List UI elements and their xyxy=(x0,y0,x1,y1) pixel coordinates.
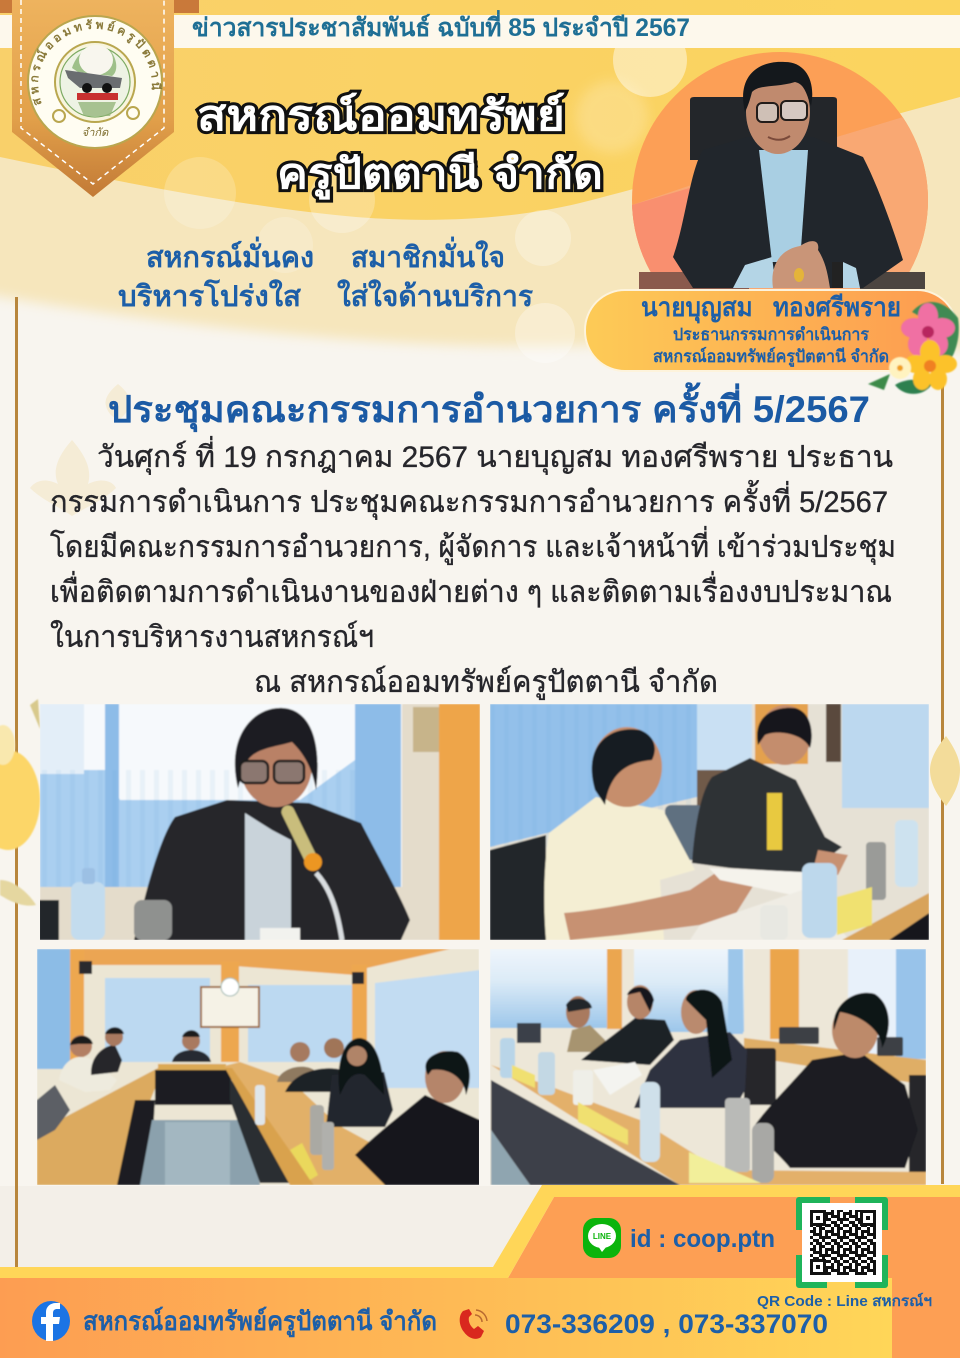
main heading: ประชุมคณะกรรมการอำนวยการ ครั้งที่ 5/2567 xyxy=(108,382,870,433)
right gold vertical rule xyxy=(941,384,944,1184)
ornament: faint thai motifs xyxy=(30,384,130,516)
ribbon badge with logo xyxy=(12,0,174,197)
article body text: เพื่อติดตามการดำเนินงานของฝ่ายต่าง ๆ และติดตามเรื่องงบประมาณ xyxy=(50,571,892,609)
icon: telephone xyxy=(460,1309,487,1339)
slogan: สหกรณ์มั่นคง xyxy=(146,236,314,274)
decorative motif at right edge xyxy=(930,736,960,806)
photo 2: two committee members at table xyxy=(490,704,929,940)
article body text: ณ สหกรณ์ออมทรัพย์ครูปัตตานี จำกัด xyxy=(254,665,718,700)
slogan: บริหารโปร่งใส xyxy=(118,278,301,313)
lower left panel tint xyxy=(0,1186,540,1268)
icon: line xyxy=(583,1218,621,1258)
qr caption: QR Code : Line สหกรณ์ฯ xyxy=(757,1292,932,1310)
logo seal: สหกรณ์ออมทรัพย์ครูปัตตานี xyxy=(31,19,162,106)
article body text: วันศุกร์ ที่ 19 กรกฎาคม 2567 นายบุญสม ทองศรีพราย ประธาน xyxy=(97,436,893,476)
photo 4: committee members along table xyxy=(490,949,926,1185)
footer text xyxy=(83,1306,828,1339)
tropical flowers decoration xyxy=(868,302,959,394)
logo seal xyxy=(27,15,163,149)
slogan xyxy=(118,236,533,313)
header background waves xyxy=(0,0,960,440)
photo 1: chairman speaking at microphone xyxy=(39,704,480,940)
line contact xyxy=(583,1218,775,1258)
organisation title: สหกรณ์ออมทรัพย์ xyxy=(197,92,565,139)
photo 3: meeting room wide view xyxy=(37,949,480,1185)
chairman name plate: ประธานกรรมการดำเนินการ xyxy=(673,325,870,344)
slogan: สมาชิกมั่นใจ xyxy=(351,236,505,274)
chairman name plate xyxy=(585,290,957,371)
footer text: 073-336209 , 073-337070 xyxy=(505,1309,828,1339)
organisation title xyxy=(197,92,603,200)
footer band xyxy=(0,1278,892,1358)
contact panel: line id and qr code xyxy=(0,1185,960,1358)
slogan: ใส่ใจด้านบริการ xyxy=(337,279,533,313)
article body text: กรรมการดำเนินการ ประชุมคณะกรรมการอำนวยการ ครั้งที่ 5/2567 xyxy=(50,480,888,521)
footer text: สหกรณ์ออมทรัพย์ครูปัตตานี จำกัด xyxy=(83,1306,437,1338)
icon: line: LINE xyxy=(593,1232,612,1241)
chairman name plate: สหกรณ์ออมทรัพย์ครูปัตตานี จำกัด xyxy=(653,346,889,368)
line contact: id : coop.ptn xyxy=(630,1225,775,1253)
decorative yellow flower at left edge xyxy=(0,699,40,906)
article body text: ในการบริหารงานสหกรณ์ฯ xyxy=(50,620,374,654)
qr code xyxy=(799,1200,885,1285)
chairman portrait xyxy=(632,52,928,289)
article body text xyxy=(50,436,896,700)
top newsletter strip: ข่าวสารประชาสัมพันธ์ ฉบับที่ 85 ประจำปี 2567 xyxy=(192,10,690,42)
people xyxy=(59,1057,117,1092)
icon: facebook xyxy=(32,1301,70,1341)
chairman name plate: นายบุญสม ทองศรีพราย xyxy=(641,292,901,324)
organisation title: ครูปัตตานี จำกัด xyxy=(277,150,603,200)
left gold vertical rule xyxy=(15,297,18,1267)
logo seal: จำกัด xyxy=(82,127,109,139)
top newsletter strip xyxy=(0,0,960,48)
people xyxy=(567,1025,605,1052)
article body text: โดยมีคณะกรรมการอำนวยการ, ผู้จัดการ และเจ้าหน้าที่ เข้าร่วมประชุม xyxy=(50,526,896,566)
